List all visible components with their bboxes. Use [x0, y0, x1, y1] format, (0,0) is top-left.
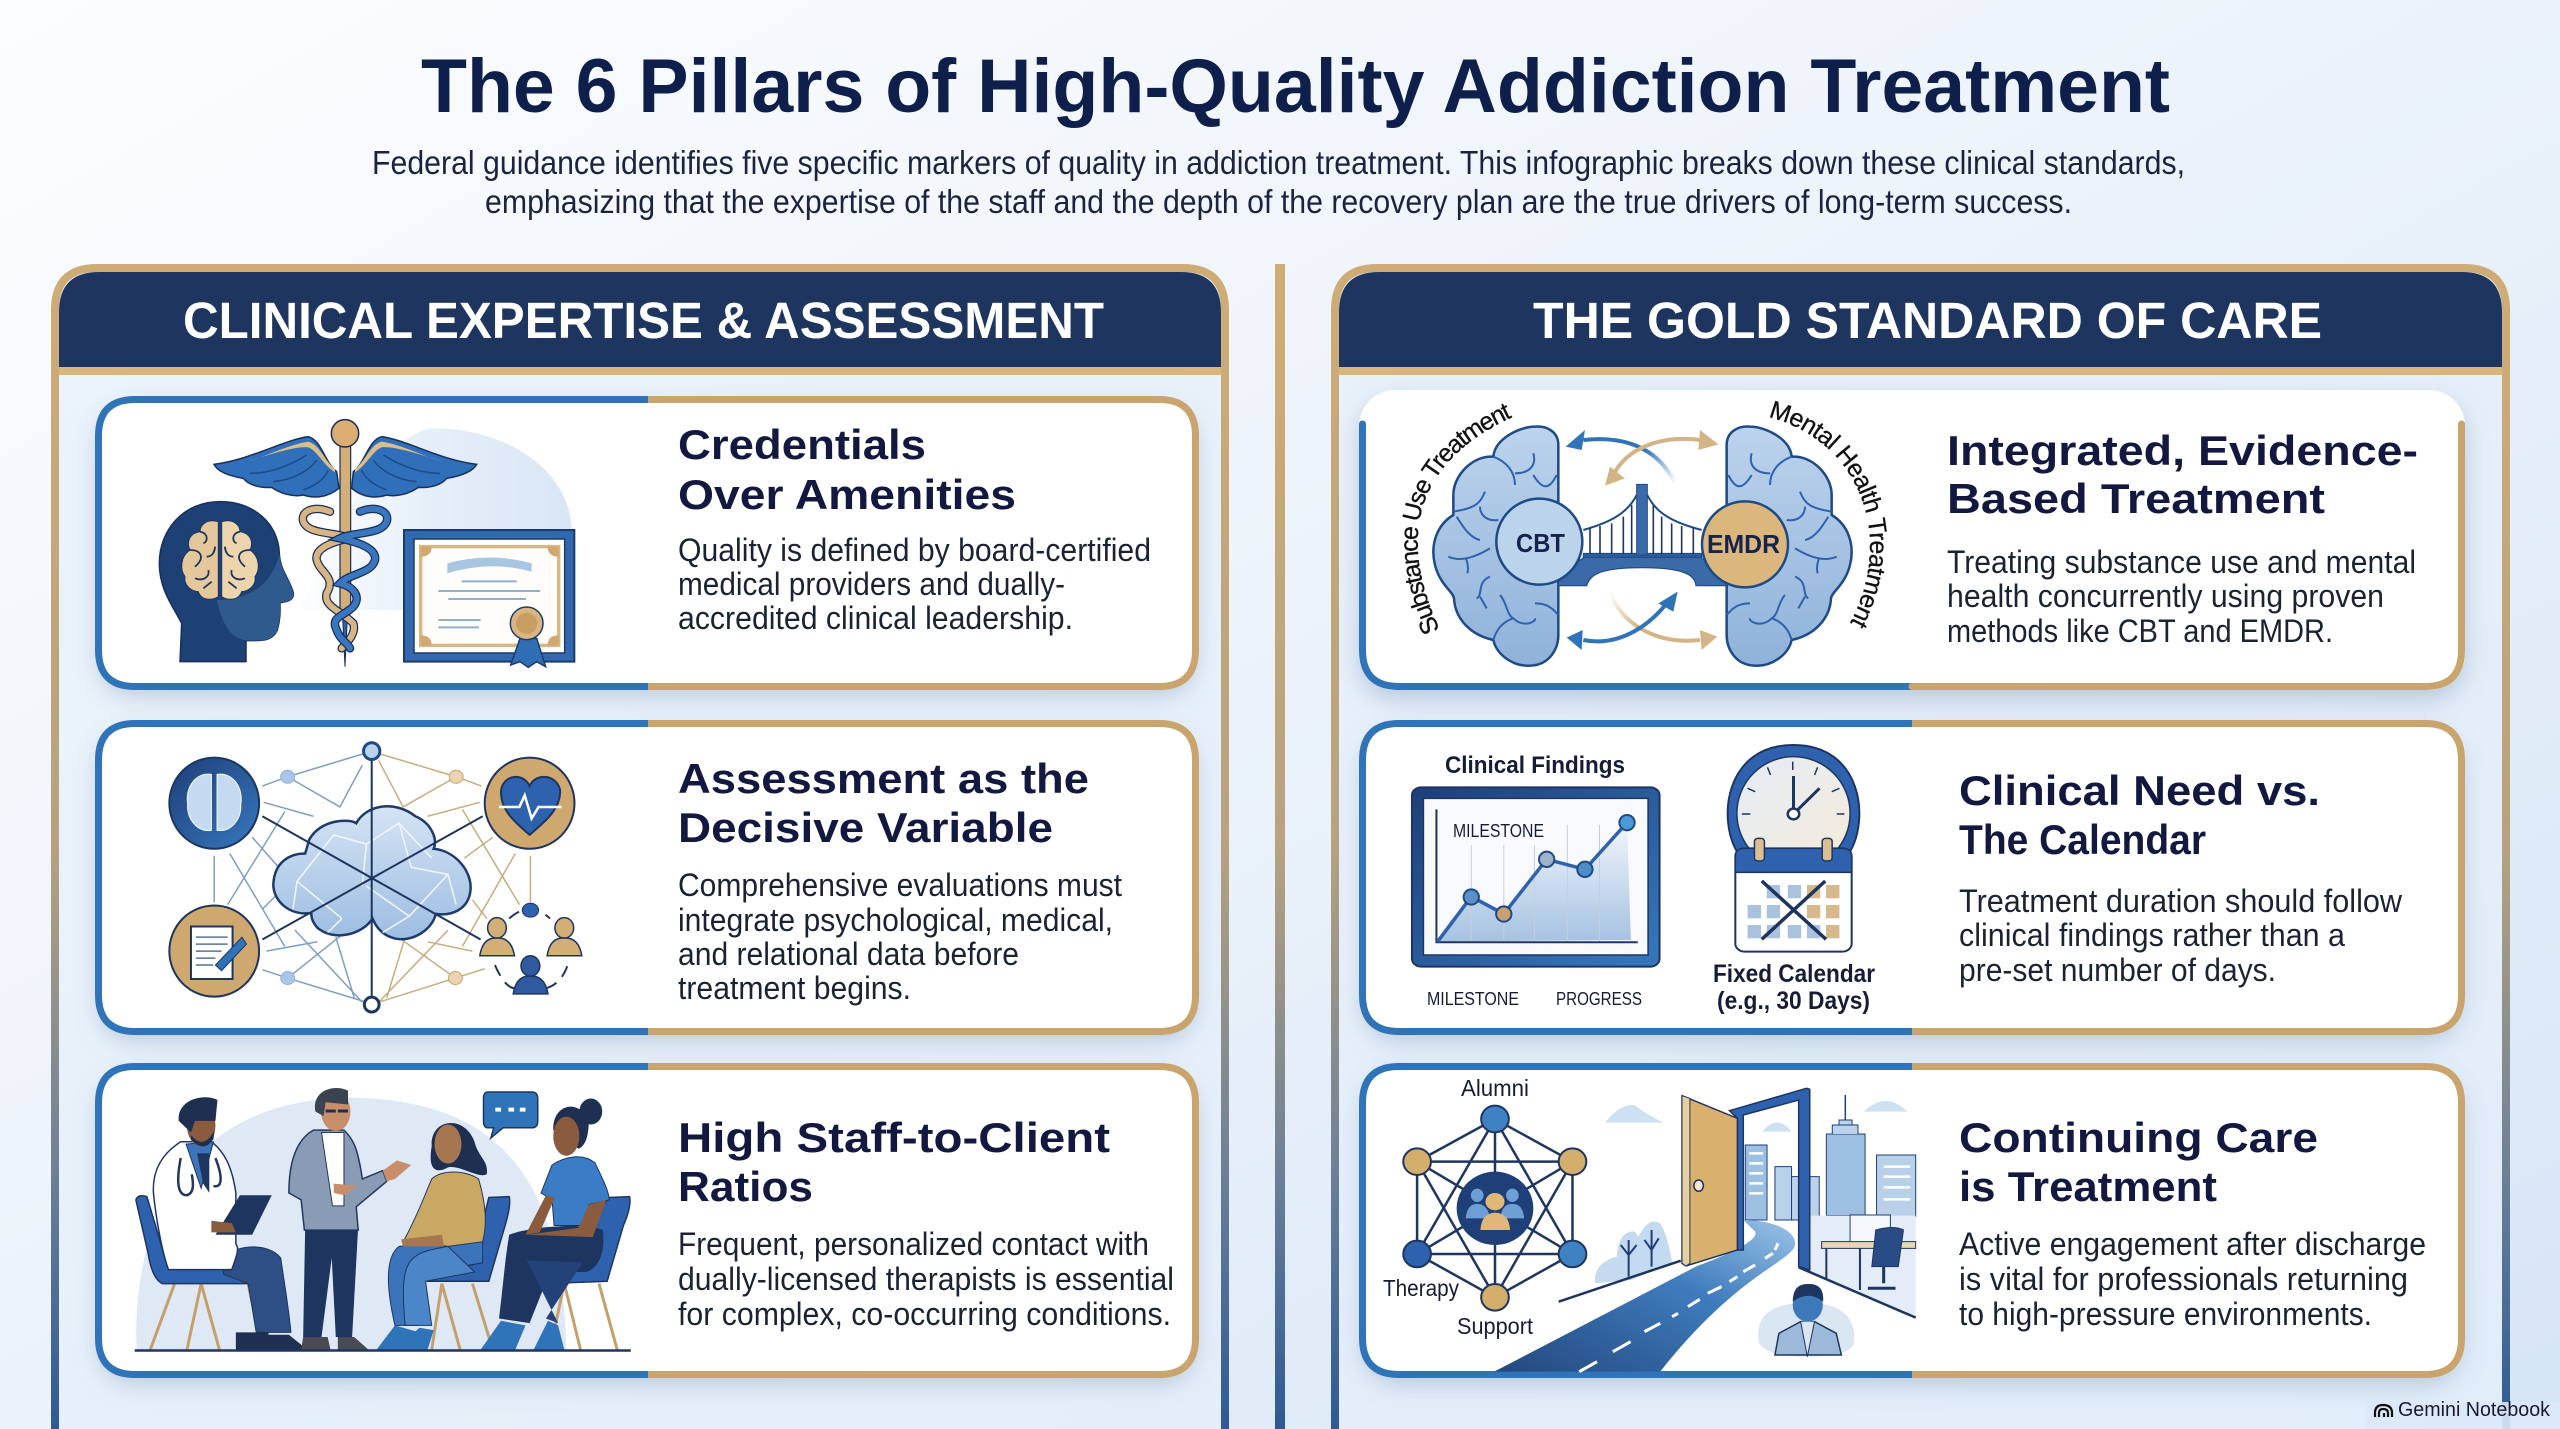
network labels: Therapy	[1383, 1275, 1459, 1301]
body text: health concurrently using proven	[1947, 578, 2384, 614]
card: continuing care is treatment	[1362, 1066, 2462, 1374]
panel: the gold standard of care	[1331, 264, 2510, 1429]
card: clinical need vs. the calendar	[1362, 724, 2462, 1032]
label: CBT: CBT	[1516, 528, 1565, 558]
heading: Continuing Care	[1959, 1114, 2318, 1161]
chart and calendar labels: MILESTONE	[1427, 989, 1519, 1009]
body text	[678, 532, 1151, 636]
heading: Based Treatment	[1947, 475, 2325, 522]
body text	[1959, 883, 2403, 988]
chart and calendar labels: PROGRESS	[1556, 989, 1642, 1009]
chart and calendar labels: Fixed Calendar	[1713, 960, 1875, 988]
body text	[1959, 1226, 2426, 1332]
body text: methods like CBT and EMDR.	[1947, 613, 2333, 649]
card: integrated, evidence-based treatment	[1348, 388, 2475, 712]
body text: and relational data before	[678, 936, 1019, 972]
body text	[1947, 544, 2416, 649]
body text: to high-pressure environments.	[1959, 1296, 2372, 1332]
body text: Frequent, personalized contact with	[678, 1226, 1149, 1262]
curved label: substance use treatment: Substance Use Treatment	[1402, 404, 1512, 634]
network labels	[1383, 1075, 1534, 1339]
body text	[678, 867, 1122, 1006]
watermark: Gemini Notebook: Gemini Notebook	[2398, 1399, 2551, 1421]
card: assessment as the decisive variable	[98, 724, 1196, 1032]
subtitle: emphasizing that the expertise of the staff and the depth of the recovery plan are the true drivers of long-term success.	[485, 183, 2072, 220]
curved label: mental health treatment: Mental Health Treatment	[1770, 400, 1887, 629]
label: EMDR: EMDR	[1707, 529, 1780, 559]
body text: clinical findings rather than a	[1959, 917, 2345, 953]
heading	[678, 755, 1089, 851]
illustration: staff and clients seated in a group	[135, 1088, 631, 1351]
card: credentials over amenities	[98, 400, 1196, 686]
chart and calendar labels	[1427, 752, 1875, 1015]
body text: Active engagement after discharge	[1959, 1226, 2426, 1262]
center divider	[1275, 264, 1285, 1429]
title: The 6 Pillars of High-Quality Addiction Treatment	[421, 44, 2170, 129]
body text	[678, 1226, 1174, 1332]
illustration: data network around cloud	[169, 743, 582, 1012]
illustration: caduceus, head and certificate	[159, 420, 574, 667]
body text: dually-licensed therapists is essential	[678, 1261, 1174, 1297]
body text: Comprehensive evaluations must	[678, 867, 1122, 903]
panel header: CLINICAL EXPERTISE & ASSESSMENT	[183, 292, 1104, 349]
panel: clinical expertise and assessment	[55, 268, 1225, 1429]
body text: medical providers and dually-	[678, 566, 1065, 602]
heading: Decisive Variable	[678, 804, 1053, 851]
heading	[1959, 1114, 2318, 1210]
body text: accredited clinical leadership.	[678, 600, 1073, 636]
body text: treatment begins.	[678, 970, 911, 1006]
heading: Ratios	[678, 1163, 813, 1210]
body text: is vital for professionals returning	[1959, 1261, 2408, 1297]
chart and calendar labels: Clinical Findings	[1445, 752, 1625, 779]
heading: The Calendar	[1959, 816, 2206, 863]
body text: Quality is defined by board-certified	[678, 532, 1151, 568]
heading: Over Amenities	[678, 471, 1016, 518]
panel header	[59, 272, 1221, 375]
heading: is Treatment	[1959, 1163, 2217, 1210]
body text: integrate psychological, medical,	[678, 902, 1113, 938]
illustration: door, road, city and professional	[1494, 1088, 1916, 1372]
heading	[1959, 767, 2320, 863]
subtitle	[372, 144, 2185, 220]
heading: Clinical Need vs.	[1959, 767, 2320, 814]
illustration: bridged brains	[1433, 427, 1852, 666]
chart and calendar labels: MILESTONE	[1453, 821, 1544, 841]
network labels: Support	[1457, 1313, 1534, 1339]
body text: Treating substance use and mental	[1947, 544, 2416, 580]
panel header	[1339, 272, 2502, 375]
illustration: support network	[1403, 1106, 1586, 1311]
heading	[678, 1114, 1110, 1210]
illustration: progress chart	[1412, 787, 1660, 967]
panel header: THE GOLD STANDARD OF CARE	[1533, 292, 2322, 349]
body text: pre-set number of days.	[1959, 952, 2276, 988]
heading: Credentials	[678, 421, 926, 468]
heading	[678, 421, 1016, 518]
illustration: clock over crossed-out calendar	[1728, 745, 1859, 952]
heading: Integrated, Evidence-	[1947, 427, 2418, 474]
card: high staff-to-client ratios	[98, 1066, 1196, 1374]
body text: Treatment duration should follow	[1959, 883, 2403, 919]
heading: High Staff-to-Client	[678, 1114, 1110, 1161]
network labels: Alumni	[1461, 1075, 1529, 1101]
subtitle: Federal guidance identifies five specific markers of quality in addiction treatment. This infographic breaks down these clinical standards,	[372, 144, 2185, 181]
heading	[1947, 427, 2418, 522]
body text: for complex, co-occurring conditions.	[678, 1296, 1171, 1332]
watermark: Gemini Notebook	[2366, 1399, 2560, 1429]
heading: Assessment as the	[678, 755, 1089, 802]
chart and calendar labels: (e.g., 30 Days)	[1717, 987, 1870, 1015]
